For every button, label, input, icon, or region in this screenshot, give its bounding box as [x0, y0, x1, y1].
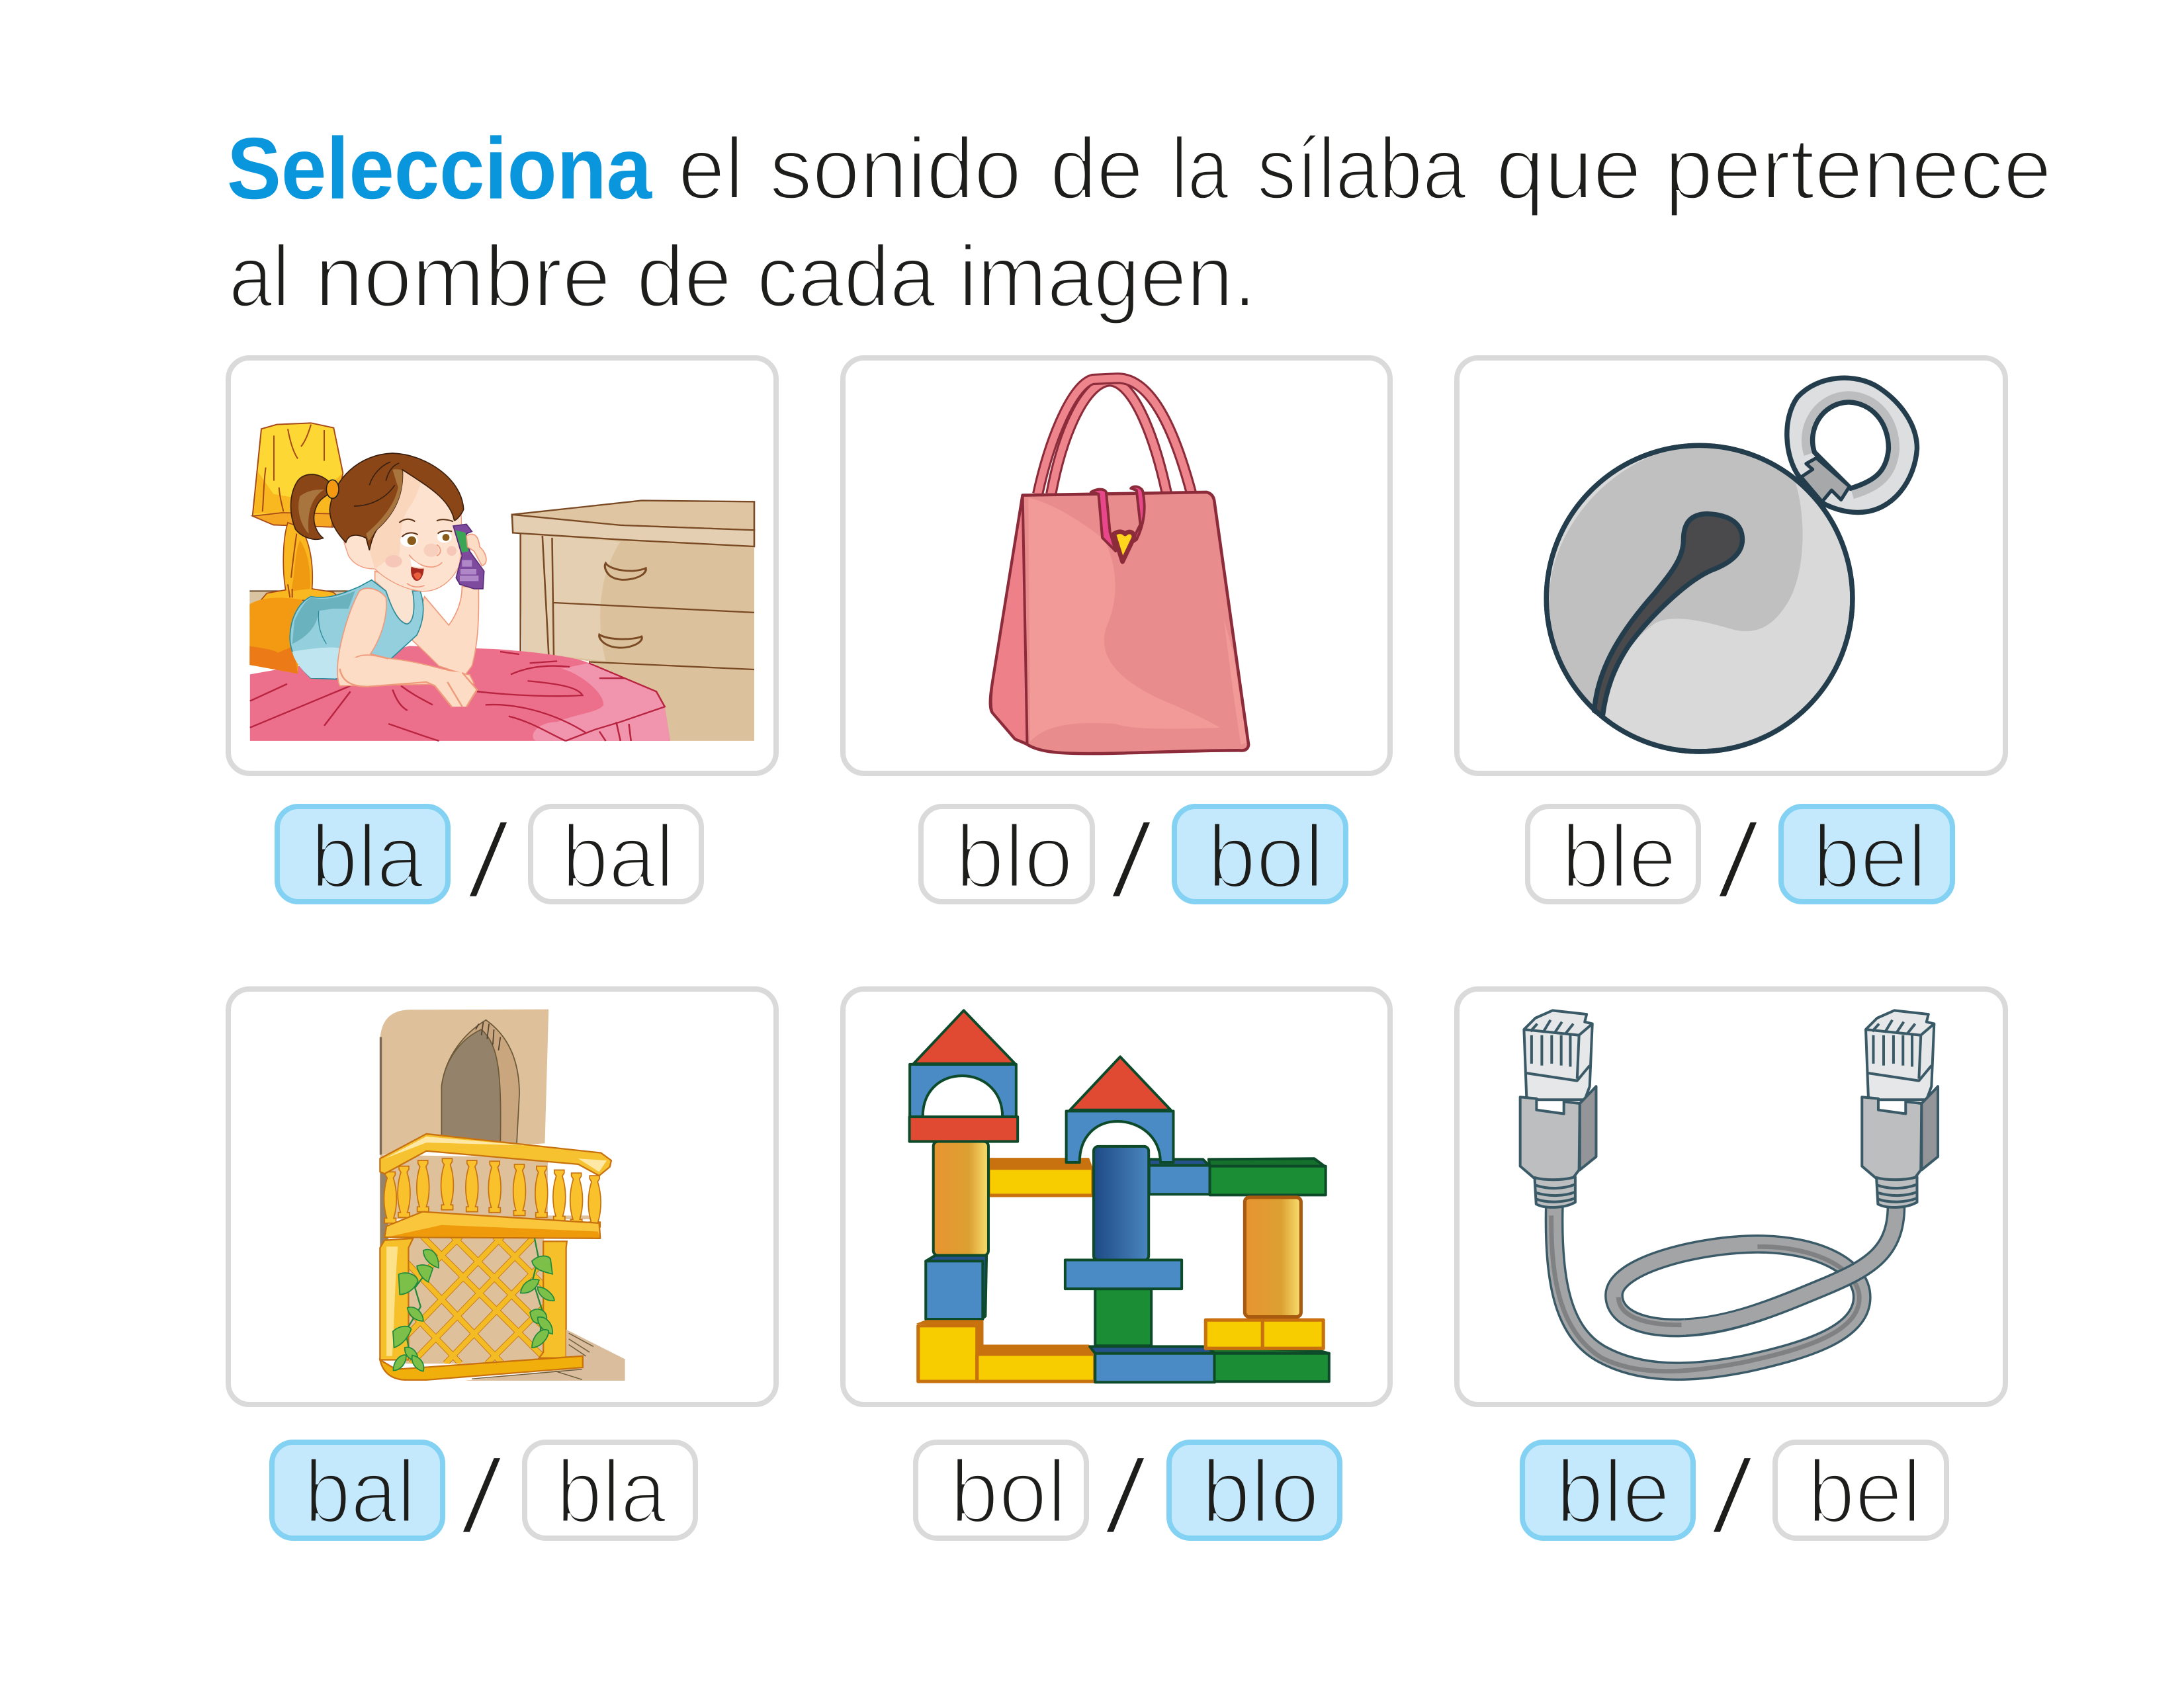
option: bol	[916, 1442, 1086, 1541]
title line 1: sílaba	[1257, 120, 1467, 217]
option: ble	[1528, 806, 1698, 906]
option: bal: bal	[562, 806, 674, 906]
answer options	[277, 801, 701, 920]
dresser and bed	[250, 501, 754, 741]
illustration: girl talking on the phone in a bedroom	[249, 423, 754, 741]
option: bla	[525, 1442, 695, 1541]
title	[227, 120, 2052, 325]
panel: ethernet cable (ble / bel)	[1457, 989, 2005, 1555]
answer options	[1522, 1437, 1946, 1555]
title line 1: pertenece	[1665, 120, 2052, 217]
title line 1: Selecciona	[227, 120, 652, 217]
illustration: golden balcony	[380, 1010, 625, 1381]
option: blo	[921, 806, 1092, 906]
answer options	[1528, 801, 1952, 920]
title line 2: al	[229, 228, 290, 325]
card frame	[228, 358, 776, 773]
card frame	[843, 358, 1390, 773]
illustration: network cable with two connectors	[1520, 1010, 1938, 1371]
selected option: bal: bal	[304, 1442, 415, 1541]
selected option: blo	[1169, 1442, 1340, 1541]
title line 1	[227, 120, 2052, 217]
illustration: bell	[1546, 378, 1917, 752]
selected option: ble: ble	[1556, 1442, 1670, 1541]
title line 2: cada	[757, 228, 936, 325]
separator: /	[466, 801, 511, 920]
illustration: building blocks castle	[910, 1010, 1329, 1382]
answer options	[272, 1437, 695, 1555]
card frame	[1457, 989, 2005, 1405]
panel: cat bell (ble / bel)	[1457, 358, 2005, 920]
card frame	[228, 989, 776, 1405]
title line 1: la	[1171, 120, 1229, 217]
selected option: bol: bol	[1207, 806, 1324, 906]
card frame	[843, 989, 1390, 1405]
selected option: bla	[277, 806, 448, 906]
separator: /	[1716, 801, 1761, 920]
title line 2: imagen.	[959, 228, 1256, 325]
selected option: bel	[1781, 806, 1952, 906]
title line 2: de	[636, 228, 732, 325]
separator: /	[1710, 1437, 1755, 1555]
panel: girl on the bed (bla / bal)	[228, 358, 776, 920]
title line 1: sonido	[769, 120, 1022, 217]
option: blo: blo	[955, 806, 1073, 906]
option: bel	[1775, 1442, 1946, 1541]
worksheet page	[226, 135, 2047, 1541]
card frame	[1457, 358, 2005, 773]
forearm and hand on the bed	[340, 658, 477, 707]
answer options	[916, 1437, 1340, 1555]
selected option: blo: blo	[1201, 1442, 1319, 1541]
panel: toy blocks (bol / blo)	[843, 989, 1390, 1555]
panel: balcony (bal / bla)	[228, 989, 776, 1555]
selected option: bla: bla	[311, 806, 424, 906]
option: bel: bel	[1808, 1442, 1921, 1541]
lamp, pillow and girl	[249, 423, 486, 686]
option: bol: bol	[950, 1442, 1067, 1541]
title line 1: que	[1496, 120, 1641, 217]
separator: /	[1109, 801, 1155, 920]
title line 2: nombre	[315, 228, 611, 325]
selected option: ble	[1522, 1442, 1693, 1541]
option: bla: bla	[556, 1442, 667, 1541]
title line 1: el	[678, 120, 744, 217]
selected option: bel: bel	[1813, 806, 1927, 906]
selected option: bal	[272, 1442, 443, 1541]
illustration: pink handbag	[990, 378, 1248, 754]
option: ble: ble	[1561, 806, 1677, 906]
selected option: bol	[1174, 806, 1346, 906]
separator: /	[459, 1437, 505, 1555]
title line 1: de	[1050, 120, 1143, 217]
separator: /	[1103, 1437, 1149, 1555]
option: bal	[531, 806, 701, 906]
answer options	[921, 801, 1346, 920]
panel: handbag (blo / bol)	[843, 358, 1390, 920]
